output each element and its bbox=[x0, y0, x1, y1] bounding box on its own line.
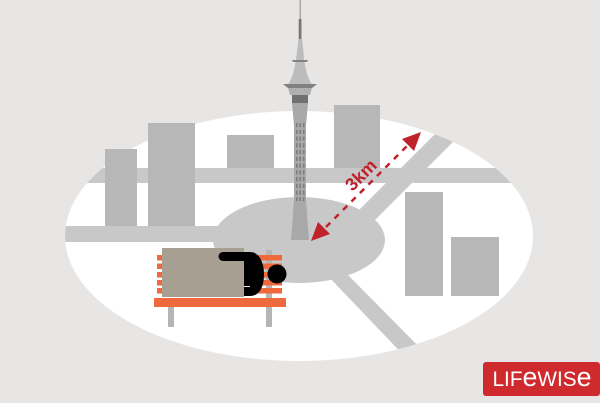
distance label: 3km bbox=[341, 155, 381, 195]
roads and central plaza bbox=[65, 134, 511, 350]
blanket bbox=[162, 248, 244, 297]
icon: Sky Tower bbox=[283, 0, 317, 240]
city buildings bbox=[105, 105, 499, 296]
logo: Lifewise: LIFeWISe bbox=[492, 362, 592, 392]
tower windows bbox=[297, 123, 304, 201]
distance arrow: 3km radius bbox=[311, 132, 421, 241]
map: white oval ground bbox=[65, 111, 533, 361]
bench back slats bbox=[157, 255, 282, 294]
person: arm highlight bbox=[244, 286, 250, 287]
bench legs bbox=[168, 250, 272, 327]
bench with sleeping person bbox=[154, 248, 286, 327]
bench seat bbox=[154, 298, 286, 307]
person: head bbox=[268, 264, 286, 284]
person: body and arm bbox=[218, 252, 264, 296]
